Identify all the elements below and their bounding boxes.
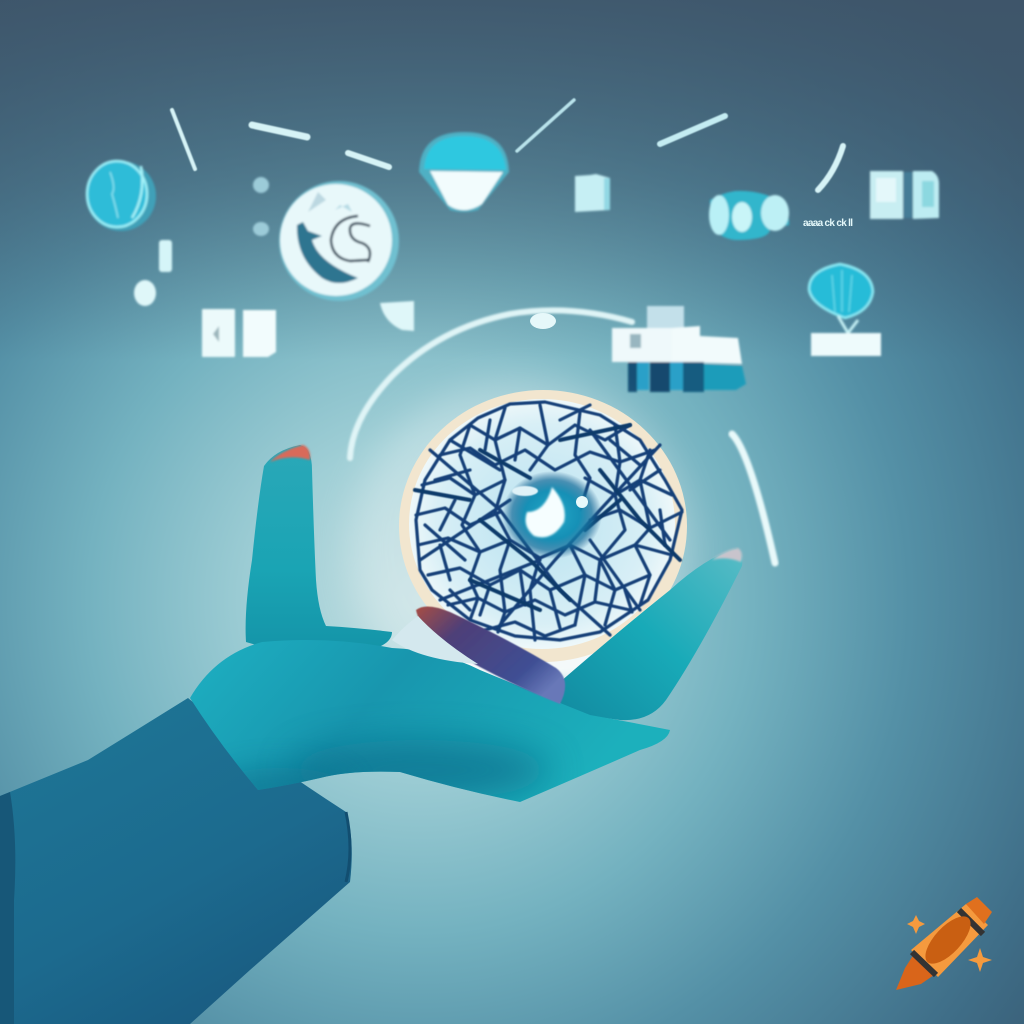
- icon: left double cards: [202, 301, 414, 357]
- network sphere: [399, 390, 687, 662]
- finger nail: [712, 548, 742, 562]
- logo: crayon: [896, 897, 992, 990]
- hand: [190, 445, 742, 812]
- icon: small caption mark: aaaa ck ck ll: [803, 218, 853, 229]
- icon: shell on plinth: [809, 264, 881, 356]
- sphere rim: [399, 390, 687, 662]
- icon: small box: [575, 174, 610, 212]
- icon: large S sphere: [279, 181, 399, 301]
- icon: capsule device: [709, 191, 789, 240]
- upright thumb: [246, 445, 392, 652]
- thumb nail: [270, 445, 310, 462]
- palm shadow: [210, 740, 550, 812]
- glow behind sphere: [350, 380, 690, 720]
- orbit arc: [350, 310, 775, 563]
- sphere disc: [409, 399, 675, 649]
- icon: half-filled dome: [419, 132, 509, 212]
- pointing finger: [560, 548, 742, 720]
- icon: factory machine: [612, 306, 746, 392]
- lower palm pale: [392, 616, 478, 664]
- icon: book panel: [870, 171, 939, 219]
- floating dashes: [172, 100, 843, 190]
- glowing core: [502, 471, 602, 559]
- fold: [416, 606, 565, 704]
- neural lines: [416, 402, 682, 640]
- icon: left blue globe: [86, 161, 156, 231]
- palm and fingers: [190, 640, 670, 802]
- sleeve: [0, 698, 352, 1024]
- icon: small dots and pills: [134, 177, 269, 306]
